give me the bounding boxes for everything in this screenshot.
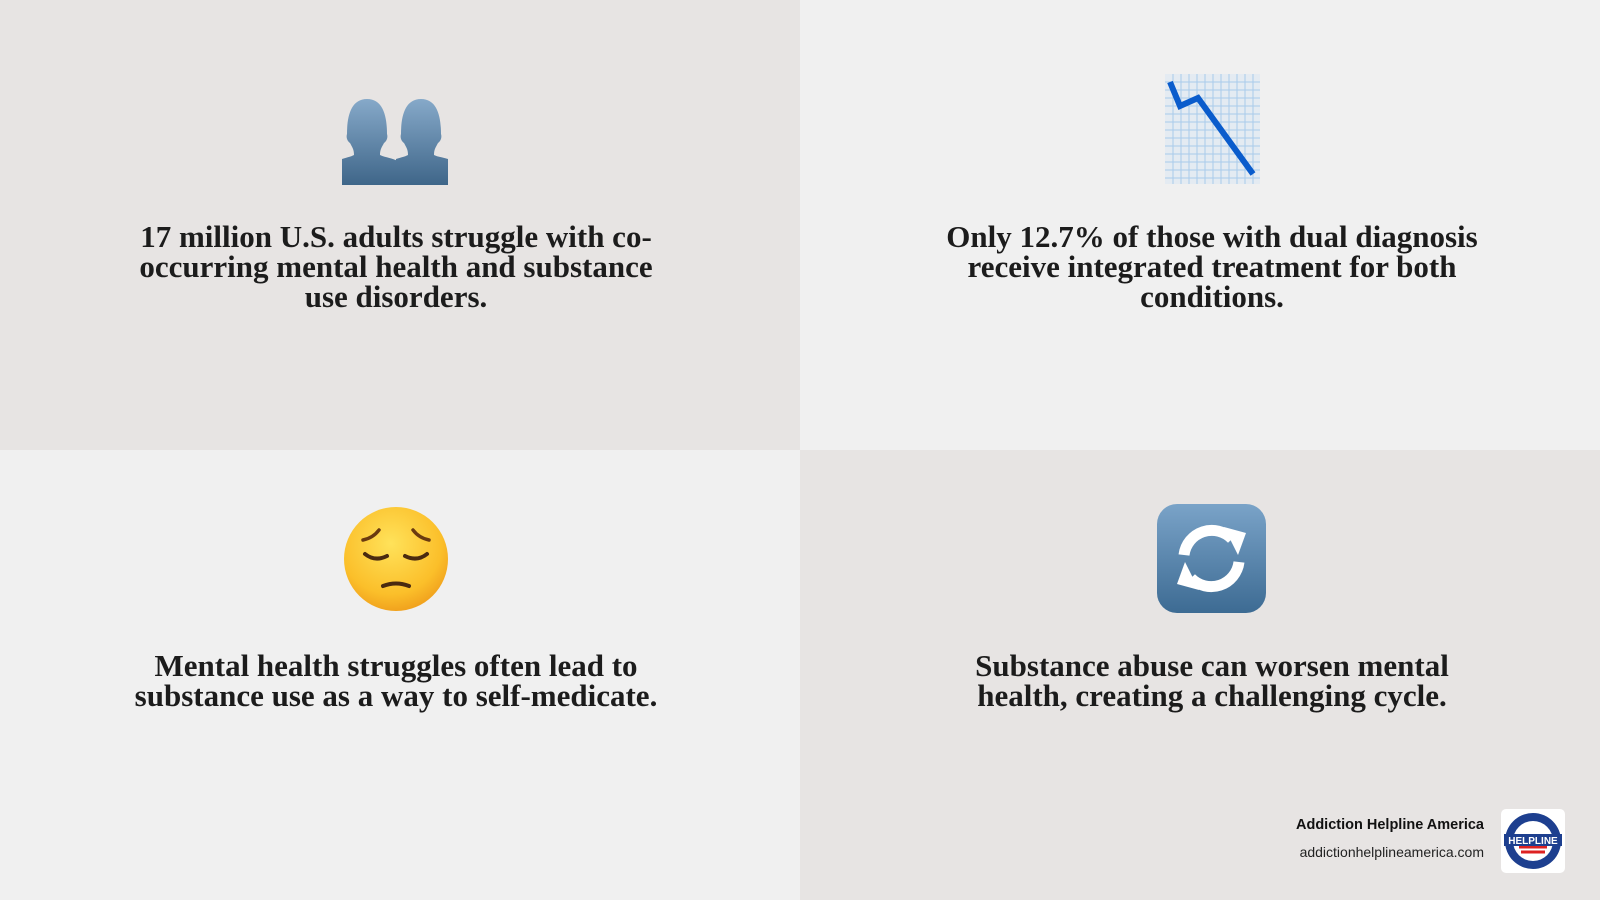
icon: pensive face [344, 507, 448, 611]
text: top-left stat: 17 million U.S. adults struggle with co-occurring mental health and substance use disorders. [139, 219, 653, 314]
icon: two people [342, 99, 448, 185]
panel: bottom-right [800, 450, 1600, 900]
panel: top-right [800, 0, 1600, 450]
text: bottom-left: Mental health struggles often lead to substance use as a way to self-medicate. [135, 648, 657, 713]
logo: HELPLINE [1508, 836, 1558, 847]
brand footer [1296, 809, 1565, 873]
text: top-right stat: Only 12.7% of those with dual diagnosis receive integrated treatment for both conditions. [946, 219, 1478, 314]
icon: refresh arrows [1157, 504, 1266, 613]
panel: bottom-left [0, 450, 800, 900]
brand name: Addiction Helpline America [1296, 817, 1484, 833]
panel: top-left [0, 0, 800, 450]
text: bottom-right: Substance abuse can worsen mental health, creating a challenging cycle. [975, 648, 1449, 713]
icon: declining chart [1165, 74, 1260, 184]
brand url: addictionhelplineamerica.com [1300, 844, 1484, 860]
logo [1501, 809, 1565, 873]
